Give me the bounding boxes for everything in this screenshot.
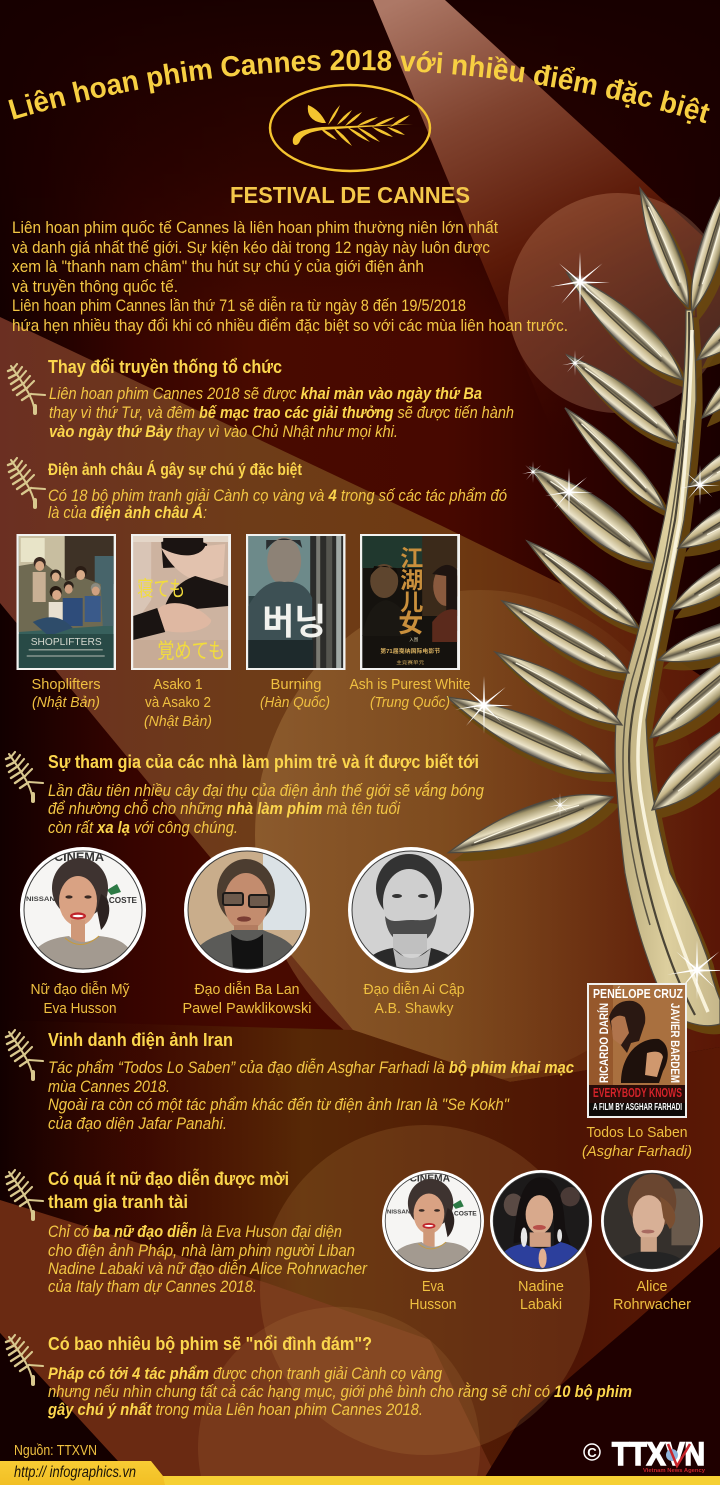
body text: còn rất xa lạ với công chúng. [48, 819, 238, 837]
caption: Burning: Burning [270, 676, 322, 693]
body text: Lần đầu tiên nhiều cây đại thụ của điện ảnh thế giới sẽ vắng bóng [48, 781, 485, 800]
body text [48, 781, 485, 837]
icon: palm in logo [293, 105, 413, 146]
caption: A.B. Shawky: A.B. Shawky [374, 1000, 454, 1017]
heading: Sự tham gia của các nhà làm phim trẻ và ít được biết tới [48, 752, 479, 772]
heading: Vinh danh điện ảnh Iran [48, 1030, 233, 1050]
heading: Thay đổi truyền thống tổ chức [48, 357, 282, 377]
body text: cho điện ảnh Pháp, nhà làm phim người Liban [48, 1242, 355, 1260]
body text: của đạo diện Jafar Panahi. [48, 1115, 227, 1133]
logo wordmark: FESTIVAL DE CANNES [230, 182, 470, 208]
section: Asian cinema [8, 458, 507, 730]
caption: Pawel Pawlikowski: Đạo diễn Ba Lan [194, 981, 300, 998]
body text: để nhường chỗ cho những nhà làm phim mà tên tuổi [48, 799, 401, 818]
footer bar with URL [0, 1461, 720, 1485]
icon: palm twig [6, 1335, 43, 1384]
poster: Ash is Purest White: 儿 [400, 589, 423, 615]
icon: palm twig [6, 752, 43, 801]
intro paragraph: và truyền thông quốc tế. [12, 278, 178, 296]
TTXVN logo [584, 1436, 706, 1474]
source note: Nguồn: TTXVN [14, 1443, 97, 1459]
section: young filmmakers [6, 752, 485, 1017]
caption: A.B. Shawky [364, 981, 464, 1017]
right leaves [640, 167, 720, 823]
caption: Eva Husson: Eva [422, 1278, 445, 1295]
caption: Eva Husson: Eva Husson [44, 1000, 116, 1017]
body text: Chỉ có ba nữ đạo diễn là Eva Huson đại diện [48, 1221, 342, 1241]
intro paragraph: Liên hoan phim quốc tế Cannes là liên hoan phim thường niên lớn nhất [12, 219, 498, 237]
poster: Everybody Knows: JAVIER BARDEM [668, 1003, 682, 1083]
section: Iranian cinema [6, 983, 692, 1160]
caption: Asako: và Asako 2 [145, 694, 211, 711]
heading [48, 1168, 289, 1212]
portrait: Pawel Pawlikowski [184, 847, 310, 973]
body text: Nadine Labaki và nữ đạo diễn Alice Rohrwacher [48, 1259, 368, 1278]
caption: Shoplifters: (Nhật Bản) [32, 694, 100, 711]
icon: palm twig [8, 364, 45, 413]
body text: Có 18 bộ phim tranh giải Cành cọ vàng và 4 trong số các tác phẩm đó [48, 487, 507, 505]
poster: Everybody Knows: RICARDO DARÍN [596, 1003, 611, 1083]
caption: Eva Husson: Nữ đạo diễn Mỹ [30, 981, 130, 998]
caption: Shoplifters: Shoplifters [32, 676, 100, 693]
caption: Eva Husson: Husson [410, 1296, 456, 1313]
heading: Điện ảnh châu Á gây sự chú ý đặc biệt [48, 460, 302, 479]
caption: Todos Lo Saben: Todos Lo Saben [586, 1124, 688, 1141]
intro paragraph: Liên hoan phim Cannes lần thứ 71 sẽ diễn ra từ ngày 8 đến 19/5/2018 [12, 296, 466, 315]
poster: Asako: 寝ても [137, 578, 185, 601]
intro paragraph: xem là "thanh nam châm" thu hút sự chú ý của giới điện ảnh [12, 258, 424, 276]
body text [48, 1058, 574, 1133]
caption: Burning: (Hàn Quốc) [260, 694, 330, 711]
icon: palm twig [6, 1170, 43, 1219]
icon: palm twig [6, 1030, 43, 1079]
body text [48, 1221, 368, 1296]
title: Liên hoan phim Cannes 2018 với nhiều điểm đặc biệt [8, 50, 710, 124]
body text: Pháp có tới 4 tác phẩm được chọn tranh giải Cành cọ vàng [48, 1365, 443, 1383]
body text [47, 1365, 632, 1419]
poster: Ash is Purest White: 第71届戛纳国际电影节 [380, 647, 441, 655]
heading: Có quá ít nữ đạo diễn được mời [48, 1168, 289, 1189]
caption: Shoplifters [32, 676, 100, 711]
poster: Everybody Knows: PENÉLOPE CRUZ [593, 986, 683, 1001]
caption: Asako: Asako 1 [154, 676, 202, 693]
body text: mùa Cannes 2018. [48, 1078, 170, 1096]
left leaves [439, 184, 699, 870]
caption: Alice Rohrwacher [613, 1278, 691, 1313]
caption: Nadine Labaki [518, 1278, 564, 1313]
footer bar with URL: http:// infographics.vn [14, 1464, 136, 1481]
body text: của Italy tham dự Cannes 2018. [48, 1278, 257, 1296]
caption: Eva Husson [410, 1278, 456, 1313]
caption: Burning [260, 676, 330, 711]
TTXVN logo: C [587, 1445, 597, 1460]
icon: golden palm branch [439, 167, 720, 1026]
intro paragraph: hứa hẹn nhiều thay đổi khi có nhiều điểm đặc biệt so với các mùa liên hoan trước. [12, 317, 568, 335]
caption: Pawel Pawlikowski: Pawel Pawklikowski [182, 1000, 312, 1017]
caption: Ash is Purest White [350, 676, 470, 711]
section: few women directors [6, 1168, 703, 1313]
poster: Everybody Knows [587, 983, 687, 1118]
poster: Burning [246, 534, 346, 670]
portrait: A.B. Shawky [348, 847, 474, 973]
caption: Todos Lo Saben [582, 1124, 692, 1160]
caption: Alice Rohrwacher: Alice [636, 1278, 668, 1295]
poster: Ash is Purest White: 江 [400, 545, 423, 571]
caption: Alice Rohrwacher: Rohrwacher [613, 1296, 691, 1313]
body text: nhưng nếu nhìn chung tất cả các hạng mục, giới phê bình cho rằng sẽ chỉ có 10 bộ phim [48, 1382, 632, 1401]
portrait: Alice Rohrwacher [601, 1170, 703, 1272]
caption: Pawel Pawlikowski [182, 981, 312, 1017]
caption: Asako [144, 676, 212, 730]
body text: Tác phẩm “Todos Lo Saben” của đạo diễn Asghar Farhadi là bộ phim khai mạc [48, 1058, 574, 1077]
caption: Eva Husson [30, 981, 130, 1017]
body text: vào ngày thứ Bảy thay vì vào Chủ Nhật như mọi khi. [49, 423, 398, 441]
intro paragraph: và danh giá nhất thế giới. Sự kiện kéo dài trong 12 ngày này luôn được [12, 239, 490, 257]
portrait: Eva Husson [20, 847, 146, 973]
poster: Ash is Purest White: 主竞赛单元 [396, 659, 425, 666]
caption: Ash is Purest White: Ash is Purest White [350, 676, 470, 693]
section: how many films [6, 1334, 632, 1419]
body text: thay vì thứ Tư, và đêm bế mạc trao các giải thưởng sẽ được tiến hành [49, 404, 514, 422]
caption: A.B. Shawky: Đạo diễn Ai Cập [364, 981, 464, 998]
poster: Ash is Purest White: 入围 [409, 637, 419, 643]
caption: Todos Lo Saben: (Asghar Farhadi) [582, 1143, 692, 1160]
body text [49, 385, 514, 441]
poster: Asako [131, 534, 231, 670]
section: organisation changes [8, 357, 514, 441]
poster: Everybody Knows: EVERYBODY KNOWS [593, 1086, 682, 1100]
poster: Ash is Purest White: 湖 [400, 567, 423, 593]
heading: Có bao nhiêu bộ phim sẽ "nổi đình đám"? [48, 1334, 372, 1354]
caption: Asako: (Nhật Bản) [144, 713, 212, 730]
poster: Shoplifters: SHOPLIFTERS [31, 636, 102, 648]
body text: là của điện ảnh châu Á: [48, 503, 207, 522]
caption: Nadine Labaki: Labaki [520, 1296, 562, 1313]
Cannes logo [230, 85, 470, 208]
TTXVN logo: Vietnam News Agency [643, 1468, 706, 1474]
icon: palm twig [8, 458, 45, 507]
portrait: Nadine Labaki [490, 1170, 592, 1272]
poster: Shoplifters [16, 534, 116, 670]
body text: gây chú ý nhất trong mùa Liên hoan phim Cannes 2018. [47, 1401, 423, 1419]
poster: Asako: 覚めても [157, 640, 225, 663]
poster: Ash is Purest White: 女 [398, 610, 423, 638]
poster: Ash is Purest White [360, 534, 460, 670]
intro paragraph [12, 219, 568, 335]
caption: Ash is Purest White: (Trung Quốc) [370, 694, 450, 711]
body text: Liên hoan phim Cannes 2018 sẽ được khai màn vào ngày thứ Ba [49, 385, 482, 403]
body text [48, 487, 507, 522]
sparkles on palm [455, 252, 720, 1000]
caption: Nadine Labaki: Nadine [518, 1278, 564, 1295]
portrait: Eva [382, 1170, 484, 1272]
TTXVN logo: TTXVN [612, 1436, 705, 1472]
heading: tham gia tranh tài [48, 1192, 188, 1212]
palm stem [615, 310, 720, 1026]
poster: Burning: 버닝 [262, 601, 326, 642]
body text: Ngoài ra còn có một tác phẩm khác đến từ điện ảnh Iran là "Se Kokh" [48, 1096, 510, 1114]
